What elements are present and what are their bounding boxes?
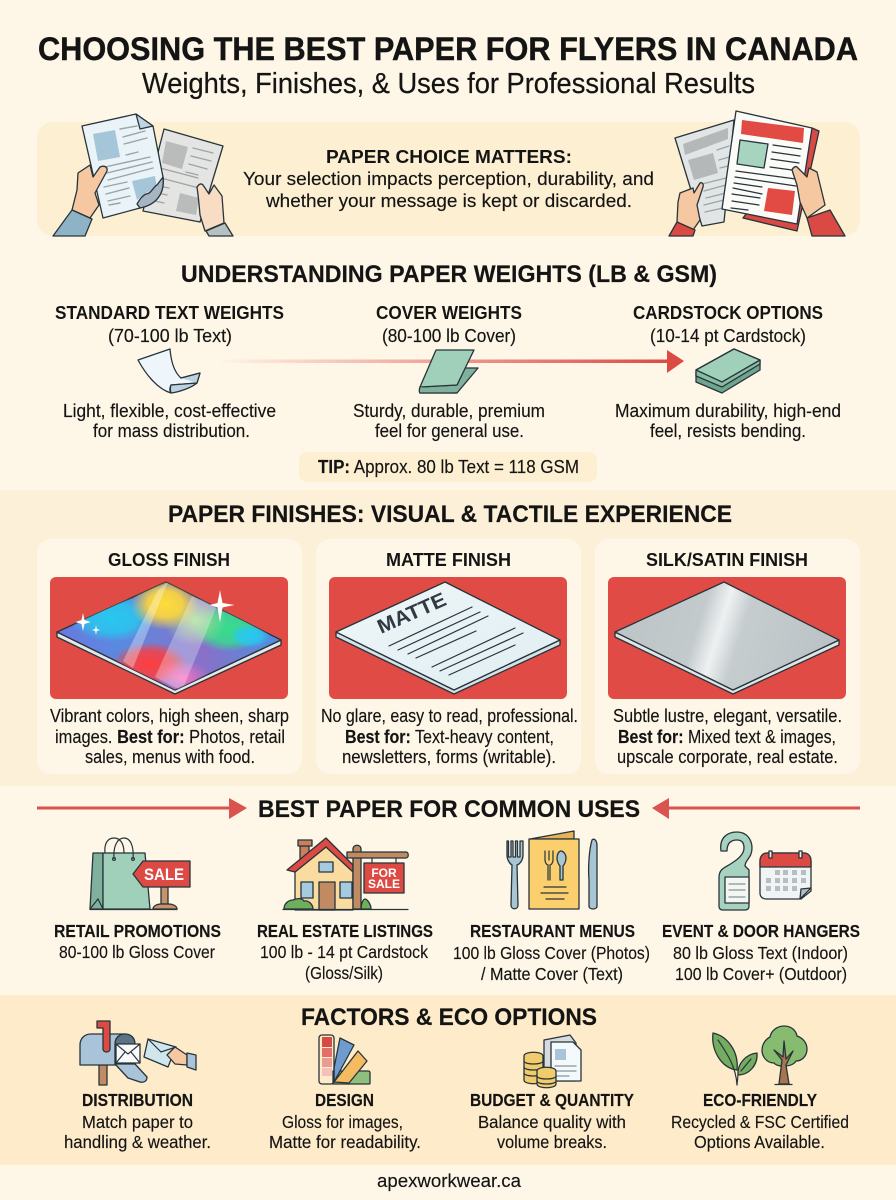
card: silk/satin: Best for: Mixed text & images, — [618, 727, 836, 747]
use: event and door hangers: EVENT & DOOR HANGERS — [662, 921, 860, 941]
use: restaurant menus: 100 lb Gloss Cover (Photos) — [453, 943, 650, 963]
column: cover weights — [353, 303, 545, 441]
column: cover weights: feel for general use. — [375, 421, 524, 441]
illustration: satin sheet — [615, 582, 839, 694]
illustration: matte sheet: MATTE — [374, 589, 450, 639]
panel: paper choice matters — [37, 111, 860, 236]
factor: eco-friendly — [671, 1026, 849, 1152]
title: CHOOSING THE BEST PAPER FOR FLYERS IN CANADA — [38, 31, 858, 67]
use: event and door hangers: 100 lb Cover+ (Outdoor) — [675, 964, 847, 984]
icon: colour swatch fan — [319, 1035, 370, 1084]
icon: house with sign: FOR — [371, 866, 397, 880]
column: cardstock options: CARDSTOCK OPTIONS — [633, 303, 823, 323]
column: cover weights: (80-100 lb Cover) — [382, 326, 516, 346]
heading: BEST PAPER FOR COMMON USES — [258, 796, 640, 823]
column: standard text weights: for mass distribution. — [93, 421, 250, 441]
factor: eco-friendly: ECO-FRIENDLY — [703, 1090, 817, 1110]
column: cover weights: Sturdy, durable, premium — [353, 401, 545, 421]
card: silk/satin — [595, 539, 860, 774]
callout: tip — [299, 452, 597, 482]
use: real estate listings: 100 lb - 14 pt Cardstock — [260, 942, 428, 962]
factor: budget and quantity — [470, 1035, 634, 1152]
illustration: gloss sheet — [57, 578, 281, 696]
use: event and door hangers — [662, 832, 860, 984]
subtitle: Weights, Finishes, & Uses for Professional Results — [142, 68, 755, 100]
footer url: apexworkwear.ca — [377, 1171, 522, 1191]
use: retail promotions — [54, 838, 221, 962]
factor: distribution: Match paper to — [82, 1112, 193, 1132]
heading: FACTORS & ECO OPTIONS — [301, 1004, 597, 1031]
column: cardstock options: (10-14 pt Cardstock) — [650, 326, 806, 346]
use: real estate listings: REAL ESTATE LISTINGS — [257, 921, 433, 941]
factor: budget and quantity: BUDGET & QUANTITY — [470, 1090, 634, 1110]
column: cover weights: COVER WEIGHTS — [376, 303, 522, 323]
use: retail promotions: 80-100 lb Gloss Cover — [59, 942, 215, 962]
icon: curled sheet — [138, 349, 200, 393]
column: standard text weights — [55, 303, 284, 441]
icon: cardstock stack — [696, 349, 760, 393]
card: silk/satin: SILK/SATIN FINISH — [646, 550, 808, 570]
factor: budget and quantity: volume breaks. — [497, 1132, 607, 1152]
icon: door hanger and calendar — [719, 832, 811, 910]
body text: Your selection impacts perception, durability, and — [243, 169, 654, 189]
card: gloss: images. Best for: Photos, retail — [55, 727, 285, 747]
illustration: matte sheet — [336, 582, 560, 694]
card: gloss — [37, 539, 302, 774]
column: standard text weights: (70-100 lb Text) — [108, 326, 232, 346]
card: silk/satin: upscale corporate, real estate. — [617, 747, 838, 767]
card: gloss: GLOSS FINISH — [108, 550, 230, 570]
illustration: hands holding plain flyers — [53, 114, 233, 236]
panel: paper weights — [55, 261, 841, 482]
column: standard text weights: Light, flexible, cost-effective — [63, 401, 276, 421]
heading: PAPER CHOICE MATTERS: — [326, 147, 572, 167]
use: restaurant menus: / Matte Cover (Text) — [481, 964, 623, 984]
icon: leaves and tree — [713, 1026, 807, 1085]
arrow: right — [652, 798, 860, 819]
arrow: left — [37, 798, 247, 819]
column: cardstock options: feel, resists bending. — [650, 421, 806, 441]
body text: whether your message is kept or discarded. — [265, 191, 632, 211]
icon: folded cover sheet — [419, 350, 478, 393]
factor: distribution: handling & weather. — [64, 1132, 211, 1152]
body text — [243, 169, 654, 211]
icon: shopping bag and sale sign — [90, 838, 190, 910]
callout: tip: TIP: Approx. 80 lb Text = 118 GSM — [318, 457, 579, 477]
illustration: hands holding printed flyers — [669, 111, 845, 236]
use: real estate listings: (Gloss/Silk) — [305, 963, 383, 983]
factor: eco-friendly: Recycled & FSC Certified — [671, 1112, 849, 1132]
card: matte: MATTE FINISH — [386, 550, 511, 570]
factor: distribution: DISTRIBUTION — [82, 1090, 193, 1110]
factor: design: DESIGN — [315, 1090, 374, 1110]
column: cardstock options — [615, 303, 841, 441]
column: standard text weights: STANDARD TEXT WEIGHTS — [55, 303, 284, 323]
factor: distribution — [64, 1021, 211, 1152]
heading: PAPER FINISHES: VISUAL & TACTILE EXPERIENCE — [168, 501, 732, 528]
factor: eco-friendly: Options Available. — [694, 1132, 825, 1152]
use: restaurant menus: RESTAURANT MENUS — [470, 921, 635, 941]
use: restaurant menus — [453, 831, 650, 984]
card: matte: newsletters, forms (writable). — [342, 747, 556, 767]
icon: house with sign: SALE — [368, 877, 400, 891]
factor: design — [269, 1035, 421, 1152]
arrow: weight progression — [218, 350, 684, 373]
card: matte: Best for: Text-heavy content, — [345, 727, 554, 747]
icon: house with sign — [283, 838, 408, 910]
use: event and door hangers: 80 lb Gloss Text (Indoor) — [673, 943, 848, 963]
card: gloss: sales, menus with food. — [85, 747, 255, 767]
factor: design: Gloss for images, — [282, 1112, 403, 1132]
card: matte: No glare, easy to read, professional. — [321, 706, 578, 726]
factor: budget and quantity: Balance quality with — [478, 1112, 626, 1132]
panel: factors and eco options — [0, 995, 896, 1165]
icon: menu with cutlery — [507, 831, 597, 909]
use: real estate listings — [257, 838, 433, 983]
column: cardstock options: Maximum durability, high-end — [615, 401, 841, 421]
panel: paper finishes — [0, 490, 896, 786]
icon: shopping bag and sale sign: SALE — [144, 865, 184, 884]
card: gloss: Vibrant colors, high sheen, sharp — [50, 706, 289, 726]
panel: common uses — [37, 796, 860, 984]
factor: design: Matte for readability. — [269, 1132, 421, 1152]
icon: coins and documents — [524, 1035, 581, 1088]
use: retail promotions: RETAIL PROMOTIONS — [54, 921, 221, 941]
card: matte — [316, 539, 581, 774]
card: silk/satin: Subtle lustre, elegant, versatile. — [613, 706, 842, 726]
icon: mailbox and envelope — [80, 1021, 196, 1085]
heading: UNDERSTANDING PAPER WEIGHTS (LB & GSM) — [181, 261, 717, 288]
